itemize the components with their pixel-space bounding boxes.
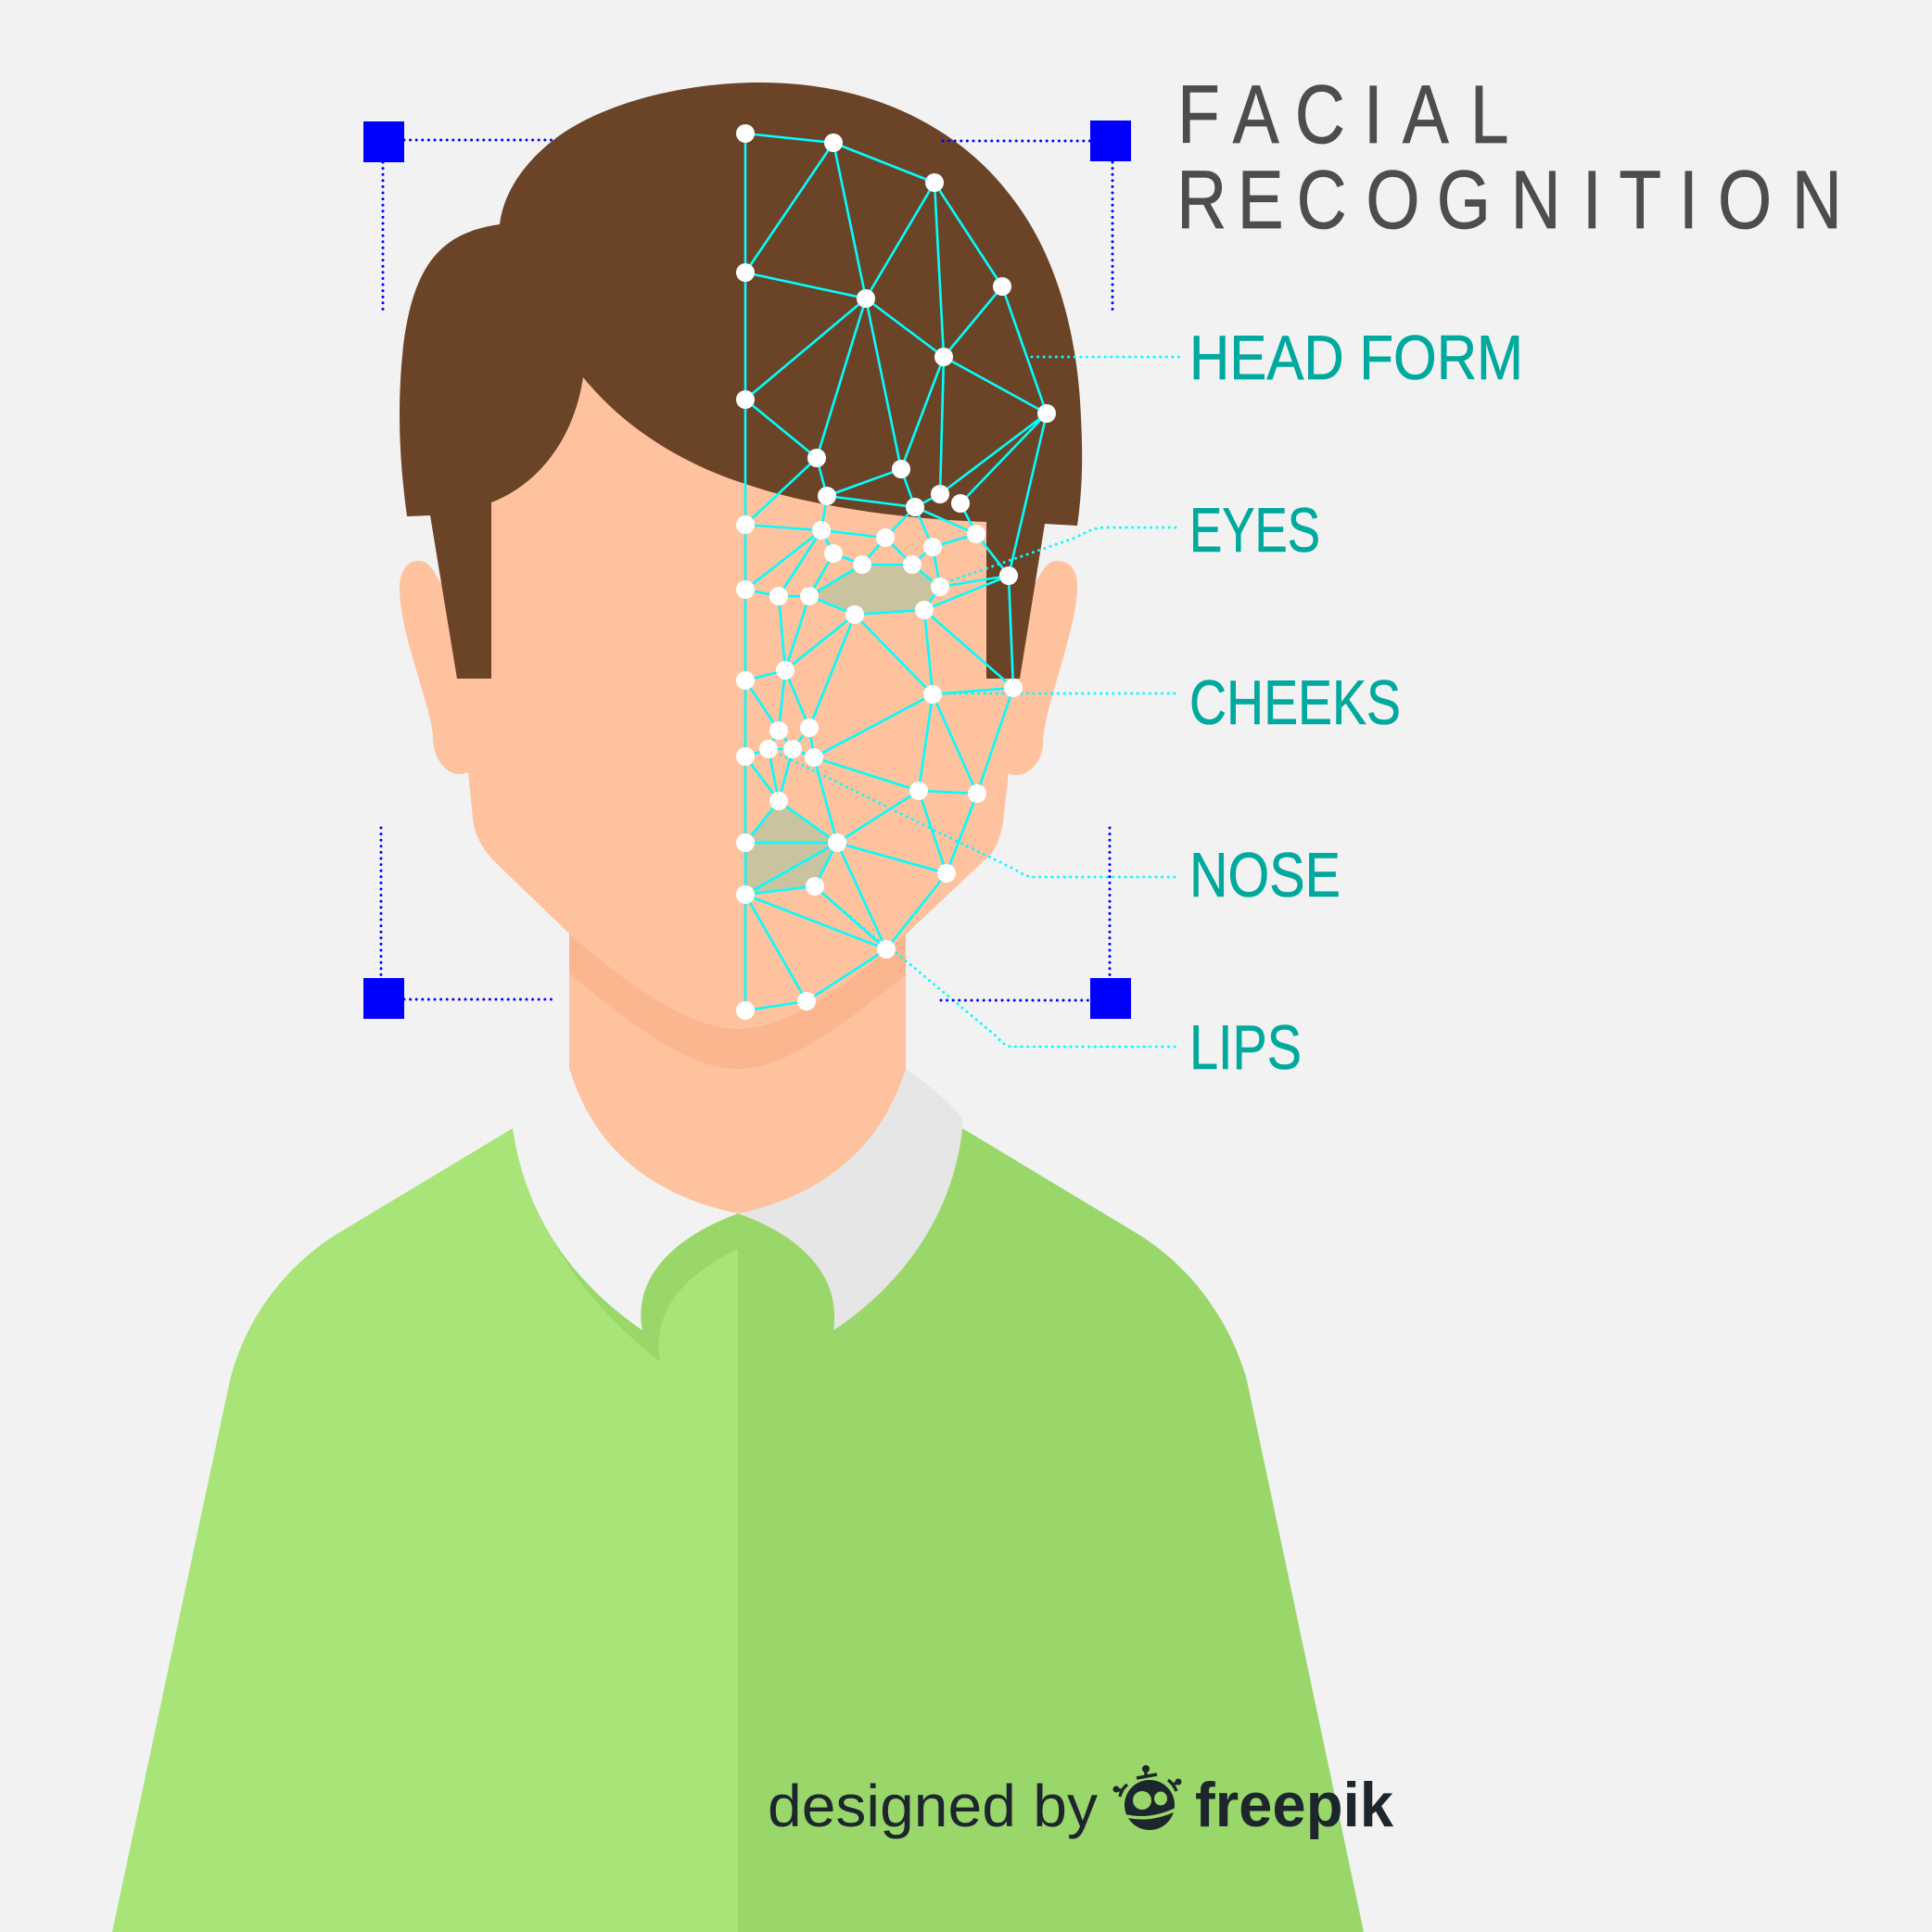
facial mesh lines — [745, 133, 1047, 1010]
label: lips: LIPS — [1189, 1012, 1302, 1083]
label: eyes: EYES — [1189, 495, 1320, 566]
label: nose: NOSE — [1189, 840, 1341, 910]
credit: designed by: designed by — [768, 1773, 1098, 1839]
blue scan corner: top left — [363, 121, 554, 311]
sweater body — [112, 1128, 1364, 1932]
cyan dotted label leaders — [781, 357, 1179, 1047]
blue scan corner: bottom right — [941, 828, 1131, 1019]
mesh nodes — [736, 124, 1056, 1020]
label: head form: HEAD FORM — [1189, 323, 1523, 393]
neck — [569, 890, 906, 1214]
title — [1176, 70, 1842, 246]
title: FACIAL — [1177, 70, 1508, 160]
title: RECOGNITION — [1176, 155, 1842, 246]
shirt collar — [513, 1068, 963, 1330]
hair — [400, 83, 1082, 679]
blue scan corner: bottom left — [363, 828, 553, 1019]
blue scan corner: top right — [943, 121, 1131, 311]
ears — [400, 561, 1077, 775]
label: cheeks: CHEEKS — [1189, 667, 1401, 738]
shaded region: eye — [809, 565, 940, 615]
shaded region: lips — [745, 801, 837, 895]
icon: freepik mascot — [1112, 1765, 1181, 1830]
credit: freepik wordmark: freepik — [1195, 1770, 1393, 1840]
face — [468, 371, 1009, 1029]
